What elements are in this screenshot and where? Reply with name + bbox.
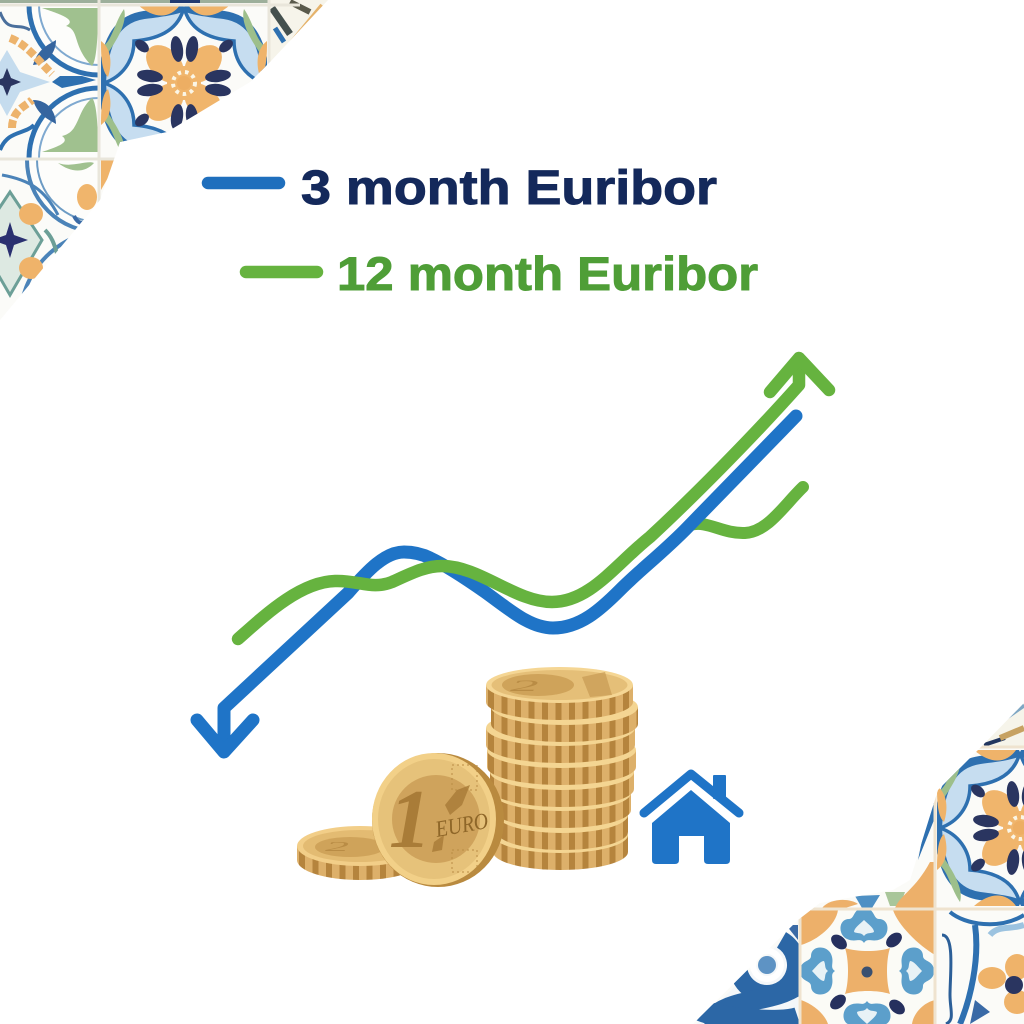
coin 1 (top): 2 (510, 677, 539, 695)
coin 7 (497, 797, 628, 850)
tile: lower right flower (937, 910, 1024, 1024)
blue line with down arrow (197, 416, 796, 752)
coin 6 (493, 775, 631, 828)
decorative tile corner: top left (0, 0, 328, 298)
tile: upper band fragments (822, 795, 935, 908)
tile: flower right (937, 750, 1024, 906)
coin 3 (486, 710, 635, 763)
decorative tile corner: bottom right (680, 690, 1024, 1024)
tile: flower (101, 5, 267, 161)
legend: 3 month Euribor: 3 month Euribor (301, 162, 717, 215)
tile: top fragment (982, 703, 1024, 746)
coin 2 (491, 689, 638, 742)
tile: spiral (696, 925, 798, 1024)
tile: lower star (0, 160, 97, 298)
tile: strip right of lower tile (101, 160, 114, 190)
icon: flat coin (297, 826, 423, 880)
tile: star and green leaves (0, 6, 98, 158)
grout lines (800, 745, 1024, 1024)
legend: 12 month Euribor: 12 month Euribor (337, 247, 758, 300)
icon: house (644, 774, 739, 864)
green branch line (690, 487, 803, 533)
coin 4 (487, 732, 636, 785)
line chart: Euribor curves (197, 358, 829, 752)
green line with up arrow (238, 358, 829, 639)
tile: top right fragment (270, 0, 330, 62)
icon: one euro coin: EURO (433, 808, 490, 842)
icon: one euro coin (372, 753, 504, 887)
icon: flat coin: 2 (325, 839, 349, 854)
coin 5 (490, 754, 634, 807)
coin 1 (top) (486, 667, 633, 720)
coin 8 (493, 817, 628, 870)
tile: top edge fragment (0, 0, 270, 3)
icon: coin stack (486, 667, 638, 870)
icon: one euro coin: 1 (389, 773, 431, 866)
grout lines (0, 0, 300, 203)
tile: orange and blue clover (800, 908, 935, 1024)
